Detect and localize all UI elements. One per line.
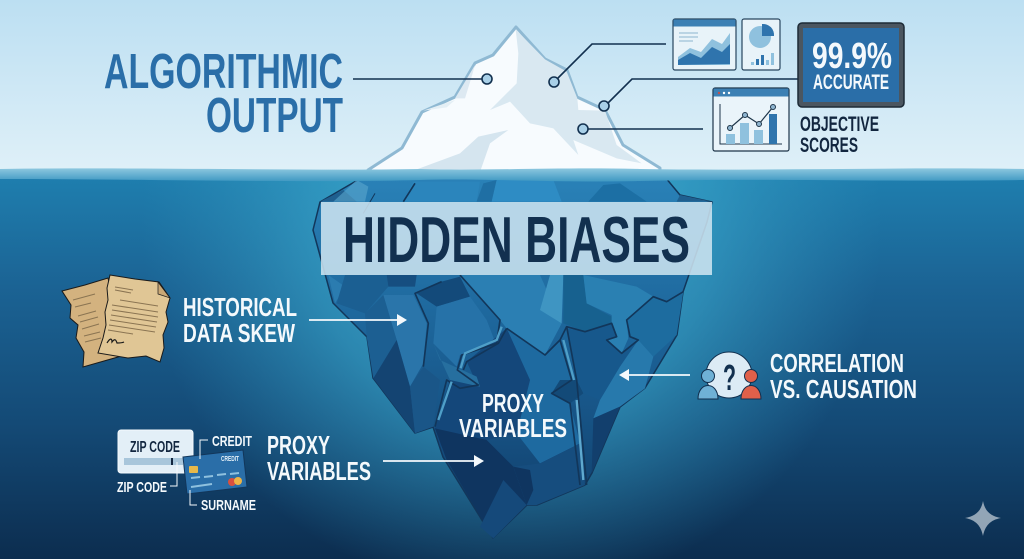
icon: sparkle watermark xyxy=(965,501,1001,536)
title: algorithmic output: OUTPUT xyxy=(206,89,343,143)
connector: objective scores xyxy=(578,124,703,134)
icon: credit card: CREDIT xyxy=(221,456,239,463)
icon: pie chart window xyxy=(742,19,780,70)
label: objective scores: OBJECTIVE xyxy=(800,113,879,136)
connector: dashboards xyxy=(549,44,666,87)
label: proxy variables left: VARIABLES xyxy=(267,456,371,486)
banner: hidden biases: HIDDEN BIASES xyxy=(343,203,690,276)
label: historical data skew xyxy=(183,292,297,348)
banner: hidden biases xyxy=(321,202,712,276)
labels: credit, zip code and surname callouts: ZIP CODE xyxy=(117,479,167,496)
icon: question bubble and people xyxy=(698,352,761,399)
label: proxy variables center: PROXY xyxy=(482,388,544,418)
iceberg facets xyxy=(320,180,712,538)
icon: question bubble and people: ? xyxy=(723,357,736,398)
label: objective scores xyxy=(800,113,879,157)
labels: credit, zip code and surname callouts: SURNAME xyxy=(201,497,256,514)
arrow: historical data skew xyxy=(309,314,407,326)
icon: line chart window xyxy=(673,19,736,70)
label: proxy variables center xyxy=(459,388,567,443)
connector: accuracy tablet xyxy=(599,79,798,111)
label: correlation vs causation xyxy=(770,348,917,404)
iceberg crack lines xyxy=(363,183,683,485)
icon: accuracy tablet xyxy=(798,23,904,107)
labels: credit, zip code and surname callouts: CREDIT xyxy=(212,433,252,450)
iceberg below water xyxy=(313,177,712,538)
icon: old documents xyxy=(62,275,170,367)
icon: score chart window xyxy=(713,88,789,151)
icon: accuracy tablet: ACCURATE xyxy=(813,71,889,94)
icon: zip code card xyxy=(118,430,193,473)
label: historical data skew: HISTORICAL xyxy=(183,292,297,322)
arrow: correlation xyxy=(619,369,690,381)
label: correlation vs causation: CORRELATION xyxy=(770,348,904,378)
title: algorithmic output xyxy=(104,45,343,143)
label: proxy variables left: PROXY xyxy=(267,430,330,460)
connector: title to iceberg xyxy=(353,74,492,84)
water surface band xyxy=(0,168,1024,181)
iceberg ice-blue crevices xyxy=(438,327,583,480)
title: algorithmic output: ALGORITHMIC xyxy=(104,45,343,99)
arrow: proxy variables xyxy=(383,455,484,467)
label: objective scores: SCORES xyxy=(800,134,858,157)
label: correlation vs causation: VS. CAUSATION xyxy=(770,374,917,404)
iceberg shaded faces xyxy=(415,29,642,170)
label: proxy variables center: VARIABLES xyxy=(459,413,567,443)
icon: accuracy tablet: 99.9% xyxy=(812,35,892,76)
sky background xyxy=(0,0,1024,172)
ocean background xyxy=(0,170,1024,559)
iceberg above water xyxy=(368,27,660,172)
icon: zip code card: ZIP CODE xyxy=(130,439,180,456)
labels: credit, zip code and surname callouts xyxy=(117,433,256,514)
label: historical data skew: DATA SKEW xyxy=(183,318,295,348)
label: proxy variables left xyxy=(267,430,371,486)
icon: credit card xyxy=(183,450,247,494)
